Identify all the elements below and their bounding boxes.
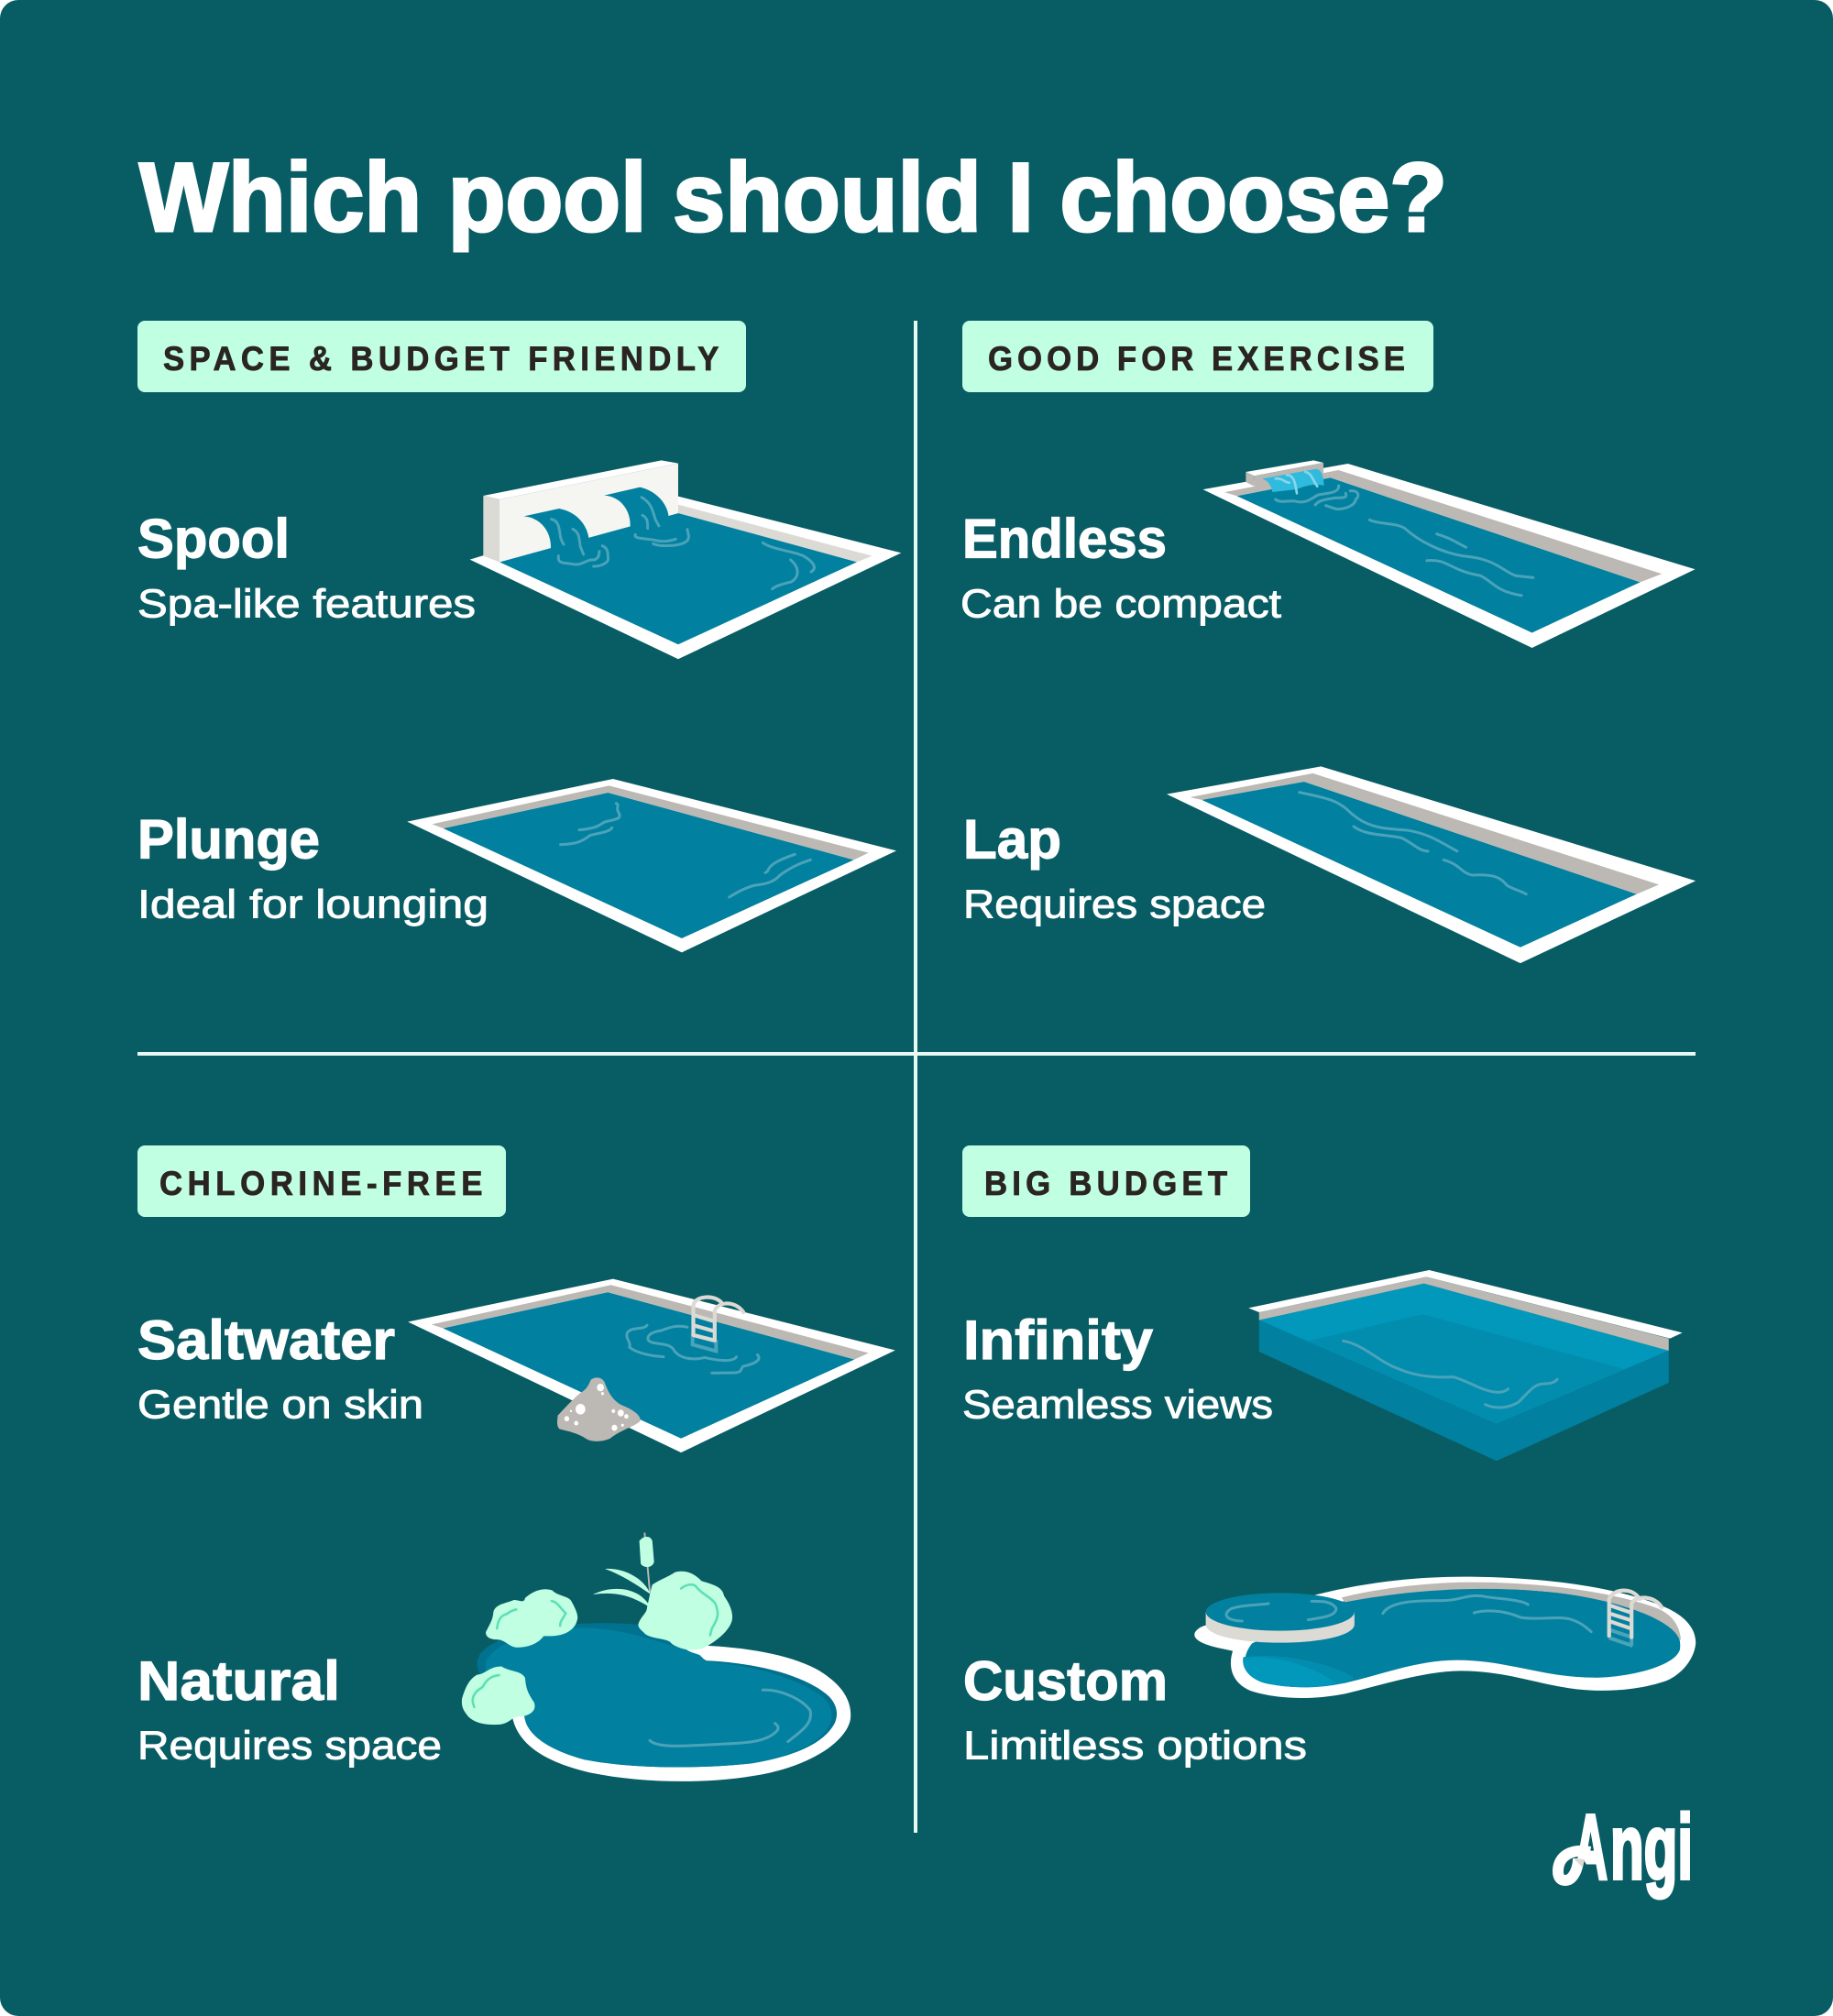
badge: big budget bbox=[962, 1145, 1250, 1217]
badge: big budget: BIG BUDGET bbox=[984, 1165, 1227, 1202]
label: plunge: Ideal for lounging bbox=[137, 882, 488, 926]
badge: good for exercise bbox=[962, 321, 1433, 392]
label: saltwater bbox=[137, 1309, 423, 1428]
label: infinity: Infinity bbox=[963, 1309, 1154, 1371]
illustration: saltwater pool bbox=[408, 1279, 895, 1452]
label: infinity bbox=[962, 1309, 1273, 1428]
illustration: spool pool bbox=[470, 460, 901, 659]
badge: space and budget friendly bbox=[137, 321, 746, 392]
label: spool: Spa-like features bbox=[137, 581, 476, 626]
badge: good for exercise: GOOD FOR EXERCISE bbox=[988, 340, 1405, 378]
label: lap bbox=[963, 808, 1266, 926]
label: custom: Limitless options bbox=[963, 1723, 1307, 1768]
panel: good for exercise bbox=[960, 321, 1696, 963]
panel: big budget bbox=[962, 1145, 1696, 1768]
illustration: natural pool bbox=[462, 1533, 851, 1781]
badge: chlorine-free: CHLORINE-FREE bbox=[159, 1165, 482, 1202]
label: custom bbox=[963, 1650, 1307, 1768]
logo: Angi bbox=[1558, 1796, 1693, 1899]
label: lap: Requires space bbox=[963, 882, 1266, 926]
label: natural: Requires space bbox=[137, 1723, 442, 1768]
badge: chlorine-free bbox=[137, 1145, 506, 1217]
label: plunge bbox=[137, 808, 488, 926]
illustration: infinity pool bbox=[1248, 1270, 1683, 1461]
label: lap: Lap bbox=[963, 808, 1061, 871]
label: plunge: Plunge bbox=[137, 808, 320, 871]
title: Which pool should I choose? bbox=[139, 142, 1447, 252]
label: endless: Can be compact bbox=[960, 581, 1281, 626]
label: endless bbox=[960, 508, 1281, 626]
label: spool: Spool bbox=[137, 508, 290, 570]
illustration: lap pool bbox=[1167, 766, 1696, 963]
label: spool bbox=[137, 508, 476, 626]
label: saltwater: Gentle on skin bbox=[137, 1382, 423, 1428]
illustration: plunge pool bbox=[407, 779, 896, 952]
logo: Angi: ngi bbox=[1610, 1796, 1693, 1899]
logo: Angi: A bbox=[1574, 1796, 1608, 1899]
badge: space and budget friendly: SPACE & BUDGET FRIENDLY bbox=[163, 340, 719, 378]
label: endless: Endless bbox=[962, 508, 1167, 570]
label: custom: Custom bbox=[963, 1650, 1168, 1712]
label: infinity: Seamless views bbox=[962, 1382, 1273, 1428]
illustration: endless pool bbox=[1203, 460, 1696, 648]
label: natural bbox=[137, 1650, 442, 1768]
illustration: custom pool bbox=[1194, 1577, 1696, 1698]
panel: space and budget friendly bbox=[137, 321, 901, 952]
label: saltwater: Saltwater bbox=[137, 1309, 395, 1371]
label: natural: Natural bbox=[137, 1650, 340, 1712]
panel: chlorine-free bbox=[137, 1145, 895, 1781]
